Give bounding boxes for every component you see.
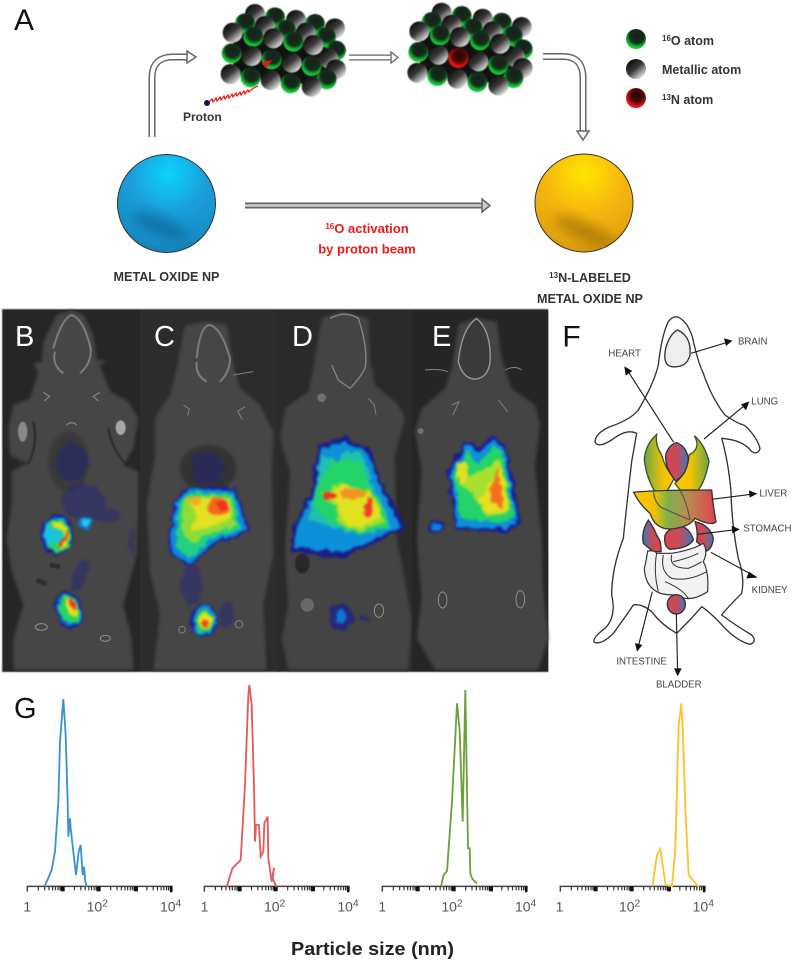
atom lattice after activation <box>407 3 533 95</box>
panel G: size distribution blue <box>23 699 182 915</box>
organ labels <box>608 337 791 691</box>
organ labels: BRAIN <box>738 337 768 348</box>
PET signal panel E <box>428 437 522 534</box>
organ labels: LUNG <box>751 397 778 408</box>
organ labels: HEART <box>608 349 641 360</box>
legend: Metallic atom <box>662 63 741 77</box>
organ: left lung <box>644 434 674 492</box>
label: 13N-labeled metal oxide NP: 13 <box>549 271 559 280</box>
CT panel E <box>413 310 548 672</box>
panel G: size distribution green: 2 <box>457 899 463 910</box>
label: 13N-labeled metal oxide NP: N-LABELED <box>558 271 631 285</box>
panel A: synthesis scheme <box>14 3 741 306</box>
label: 13N-labeled metal oxide NP: METAL OXIDE NP <box>537 292 643 306</box>
panel label B: B <box>15 321 34 353</box>
caption: activation by proton beam: by proton beam <box>318 242 416 256</box>
panel G: size distribution blue: 10 <box>160 899 176 915</box>
panel G: size distribution red: 4 <box>353 899 359 910</box>
organ labels: KIDNEY <box>752 585 788 596</box>
panel F: mouse organ diagram <box>562 317 791 691</box>
caption: activation by proton beam: 16 <box>325 222 335 231</box>
CT panel B <box>3 310 140 672</box>
PET signal panel D <box>292 437 407 631</box>
panel label C: C <box>154 321 175 353</box>
atom lattice before activation <box>221 4 346 97</box>
proton beam <box>204 60 272 106</box>
panel G: size distribution yellow: 10 <box>619 899 635 915</box>
panel G: size distribution green: 1 <box>378 899 386 915</box>
organ: right kidney <box>695 522 713 551</box>
legend <box>626 29 741 108</box>
organ: stomach <box>665 526 693 549</box>
panel G: size distribution blue: 10 <box>87 899 102 915</box>
caption: activation by proton beam: O activation <box>334 221 409 236</box>
PET signal panel C <box>168 452 250 636</box>
arrow: direct activation <box>245 199 490 212</box>
arrowheads <box>624 338 757 676</box>
panel G: size distribution yellow: 1 <box>556 899 564 915</box>
organ: heart <box>666 443 688 481</box>
panel G: size distribution red: 1 <box>201 899 209 915</box>
panel label E: E <box>432 321 451 353</box>
legend: N atom <box>671 93 713 107</box>
panel G: size distribution blue: 2 <box>102 899 108 910</box>
legend: O atom <box>671 34 714 48</box>
panel G: size distribution red: 2 <box>280 899 286 910</box>
legend: 13 <box>662 93 671 102</box>
CT panel D <box>278 310 413 672</box>
panel G: size distribution red: 10 <box>337 899 353 915</box>
organ labels: BLADDER <box>656 680 702 691</box>
organ: intestine <box>644 543 708 599</box>
organ labels: STOMACH <box>743 524 791 535</box>
mouse outline <box>594 317 760 644</box>
arrow: sphere up to lattice <box>152 51 196 137</box>
panel G: size distribution green <box>378 690 537 915</box>
organ labels: INTESTINE <box>616 656 667 667</box>
label: metal oxide NP: METAL OXIDE NP <box>114 270 219 284</box>
panel label F: F <box>562 321 581 354</box>
panel G: size distribution red <box>201 685 359 915</box>
panel G: size distribution yellow: 2 <box>635 899 641 910</box>
organ labels: LIVER <box>759 488 787 499</box>
panel label A: A <box>14 4 34 37</box>
gold labeled sphere <box>535 154 633 255</box>
label: proton: Proton <box>183 110 222 124</box>
arrow: lattice to lattice <box>349 52 398 63</box>
panel G: size distribution blue: 1 <box>23 899 31 915</box>
blue metal oxide sphere <box>118 154 216 252</box>
organ: right lung <box>675 436 709 490</box>
organ: left kidney <box>643 520 661 552</box>
panel G: size distribution green: 10 <box>515 899 531 915</box>
panel label G: G <box>14 693 37 725</box>
x-axis title: Particle size (nm) <box>291 938 454 959</box>
organ: brain <box>665 330 690 367</box>
leader arrows <box>626 341 756 675</box>
panel G: size distribution blue: 4 <box>176 899 182 910</box>
image backdrop <box>2 309 548 672</box>
panel G: size distribution yellow: 4 <box>708 899 714 910</box>
legend: 16 <box>662 34 671 43</box>
panel G: size distribution green: 4 <box>531 899 537 910</box>
arrow: lattice down to labeled sphere <box>543 56 589 140</box>
panels B-E: PET-CT images <box>2 309 548 672</box>
panel G: size distribution green: 10 <box>441 899 457 915</box>
panel label D: D <box>292 321 313 353</box>
panel G: size distribution yellow <box>556 703 714 915</box>
CT panel C <box>140 310 280 672</box>
panel G: size distribution red: 10 <box>264 899 280 915</box>
organ: liver <box>634 490 716 529</box>
organ: bladder <box>667 595 685 614</box>
PET signal panel B <box>41 442 135 632</box>
panel G: size distribution yellow: 10 <box>693 899 708 915</box>
